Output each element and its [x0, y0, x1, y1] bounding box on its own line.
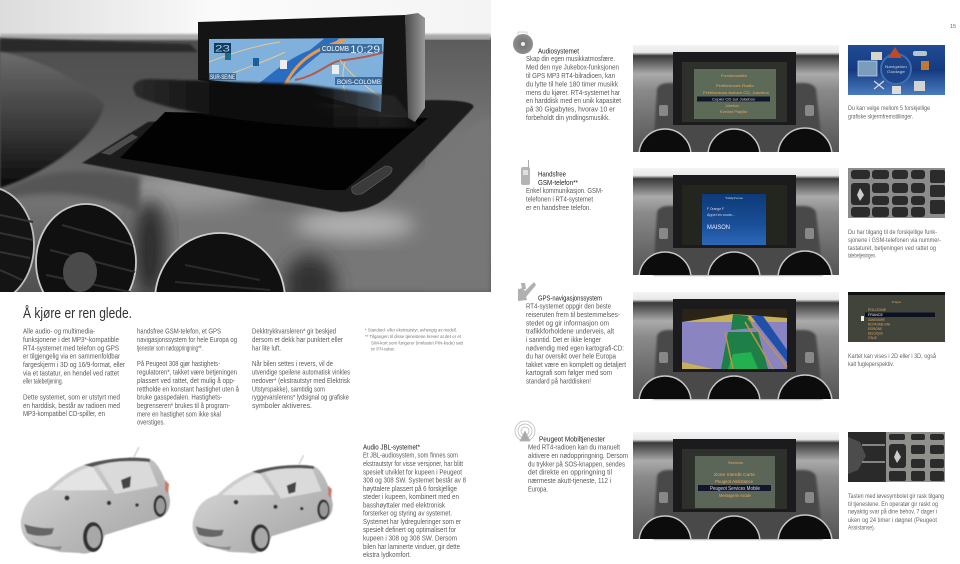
dashboard photo: phone screen: MAISON — [707, 225, 730, 231]
GPS text: standard på harddisken! — [526, 376, 591, 386]
intro text column 2: tjenester som nødoppringning**. — [137, 343, 203, 352]
page number: 15 — [950, 24, 956, 30]
JBL audio text block — [363, 442, 466, 559]
caption: lion key: Assistanse). — [848, 524, 875, 532]
dashboard photo: services menu: Messagerie vocale — [719, 493, 752, 498]
caption: phone keypad: talebetjeningen. — [848, 252, 876, 260]
map screen: COLOMB — [322, 46, 349, 53]
footnotes: * Standard- eller ekstrautstyr, avhengig av modell. — [365, 328, 457, 332]
folding screen flap — [133, 79, 420, 128]
intro text column 1: er tilgjengelig via en sammenfoldbar — [23, 352, 120, 361]
audio system text: mens du kjører. RT4-systemet har — [526, 88, 620, 97]
car illustration: speakers left — [21, 447, 170, 554]
dashboard photo: audio menu: Jukebox — [725, 103, 739, 108]
intro text column 1: en harddisk, består av radioen med — [23, 401, 120, 410]
intro text column 3: har lite luft. — [252, 343, 281, 352]
Peugeot mobile services text: du trykker på SOS-knappen, sendes — [528, 459, 625, 468]
recess black interior — [120, 112, 428, 190]
intro text column 3: symboler aktiveres. — [252, 401, 312, 410]
GPS text: GPS-navigasjonssystem — [538, 294, 602, 302]
intro text column 2: handsfree GSM-telefon, et GPS — [137, 326, 221, 336]
GPS text: i sanntid. Det er ikke lenger — [526, 335, 601, 344]
Peugeot mobile services text: Europa. — [528, 484, 548, 493]
dashboard photo: phone screen: F Orange F — [707, 206, 724, 211]
caption: phone keypad: sjonene i GSM-telefonen via nummer- — [848, 237, 941, 244]
caption: graphic themes: grafiske skjermfremstillinger. — [848, 114, 913, 120]
dashboard photo: phone screen: Appel en cours... — [707, 212, 735, 217]
thumbnail: map language menu: FRANCE — [868, 313, 883, 317]
handsfree text — [526, 170, 603, 212]
intro text column 1: funksjonene i det MP3*-kompatible — [23, 335, 119, 344]
map screen: BOIS-COLOMB — [337, 79, 381, 86]
intro text column 2: rettholde en konstant hastighet uten å — [137, 384, 240, 393]
intro text column 3: Når bilen settes i revers, vil de — [252, 359, 333, 368]
thumbnail: graphic theme menu: Navigation — [885, 65, 907, 69]
audio system text: en harddisk med en unik kapasitet — [526, 96, 621, 105]
footnotes: inn i RT4-radioen. — [371, 346, 395, 352]
hero photo: fold-out navigation screen — [0, 0, 491, 292]
intro text column 3: ryggevarslerens* lydsignal og grafiske — [252, 393, 349, 402]
dashboard photo: audio menu: Préférences lecture CD, Jukebox — [703, 90, 769, 95]
caption: phone keypad: tastaturet, betjeningen ved rattet og — [848, 245, 936, 252]
thumbnail: phone keypad — [848, 168, 945, 218]
dashboard photo: phone screen — [633, 168, 839, 305]
caption: lion key: til tjenestene. En operatør gir raskt og — [848, 501, 938, 508]
icon: GPS satellite — [518, 282, 536, 301]
Peugeot mobile services text — [528, 434, 628, 493]
JBL audio text block: basshøyttaler med elektronisk — [363, 500, 445, 509]
Peugeot mobile services text: Med RT4-radioen kan du manuelt — [528, 442, 620, 452]
intro text column 1: RT4-systemet med telefon og GPS — [23, 343, 119, 352]
dashboard photo: audio menu: Fonctionnalités — [721, 73, 747, 78]
JBL audio text block: bilen har laminerte vinduer, gir dette — [363, 542, 460, 551]
intro text column 3: nedover* (ekstrautstyr med Elektrisk — [252, 376, 350, 385]
thumbnail: map language menu: POLOGNE — [868, 308, 886, 312]
handsfree text: Enkel kommunikasjon. GSM- — [526, 186, 603, 195]
caption: phone keypad — [848, 229, 941, 260]
intro text column 2: overstiges. — [137, 418, 165, 427]
car illustration: speakers right — [193, 455, 333, 553]
caption: map views — [848, 352, 936, 368]
JBL audio text block: ekstra lydkomfort. — [363, 550, 411, 559]
dashboard photo: services menu: Peugeot Services Mobile — [710, 486, 760, 492]
intro text column 1: fargeskjerm i 3D og 16/9-format, eller — [23, 360, 125, 369]
intro text column 1: Alle audio- og multimedia- — [23, 326, 95, 336]
handsfree text: Handsfree — [538, 170, 566, 178]
JBL audio text block: spesielt utviklet for kupeen i Peugeot — [363, 467, 462, 476]
right small button — [352, 166, 392, 194]
intro text column 3 — [252, 326, 350, 410]
intro text column 1: Dette systemet, som er utstyrt med — [23, 392, 120, 402]
audio system text: til GPS MP3 RT4-bilradioen, kan — [526, 71, 615, 80]
air vents — [0, 188, 286, 292]
footnotes — [365, 328, 464, 352]
audio system text: Skap din egen musikkatmosfære. — [526, 54, 615, 63]
dashboard photo: phone screen: Téléphone — [725, 196, 743, 200]
handsfree text: GSM-telefon** — [538, 178, 578, 187]
GPS text: nødvendig med egen kartografi-CD: — [526, 343, 624, 352]
JBL audio text block: ekstrautstyr for visse versjoner, har blitt — [363, 459, 463, 468]
map screen: SUR-SEINE — [210, 75, 235, 81]
thumbnail: lion key — [848, 432, 945, 482]
JBL audio text block: Et JBL-audiosystem, som finnes som — [363, 451, 458, 460]
audio system text: Audiosystemet — [538, 46, 579, 56]
intro column heading: Å kjøre er ren glede. — [23, 305, 132, 322]
Peugeot mobile services text: nærmeste akutt-tjeneste, 112 i — [528, 476, 611, 485]
map screen: 10:29 — [350, 44, 380, 56]
thumbnail: map language menu: BELGIQUE — [868, 332, 883, 336]
GPS text: trafikkforholdene underveis, alt — [526, 327, 614, 336]
dashboard photo: audio menu: Préférences Radio — [716, 83, 755, 88]
recess surround — [82, 100, 473, 212]
JBL audio text block: Systemet har lydreguleringer som er — [363, 517, 461, 526]
JBL audio text block: høyttalere plassert på 6 forskjellige — [363, 484, 457, 493]
intro text column 3: dersom et dekk har punktert eller — [252, 335, 343, 344]
audio system text — [526, 46, 621, 122]
map screen: 23 — [215, 44, 230, 54]
footnotes: SIM-kort som fungerer (innlastet PIN-kode) satt — [371, 340, 464, 346]
intro text column 2: mere en hastighet som ikke skal — [137, 409, 221, 418]
audio system text: du lytte til hele 180 timer musikk — [526, 79, 618, 88]
GPS text: stedet og gir informasjon om — [526, 318, 609, 327]
dashboard photo: services menu — [633, 432, 839, 564]
icon: CD and music sheet — [513, 32, 533, 54]
GPS text: takket være en komplett og detaljert — [526, 360, 626, 369]
intro text column 1: via et tastatur, en hendel ved rattet — [23, 368, 119, 377]
left dashboard hump — [0, 52, 104, 188]
footnotes: ** Tilgangen til disse tjenestene krever at det er et — [365, 334, 462, 339]
intro text column 3: Utstyrspakke), samtidig som — [252, 384, 325, 393]
intro text column 3: utvendige speilene automatisk vinkles — [252, 368, 350, 376]
intro text column 1: eller talebetjening. — [23, 377, 63, 386]
GPS text: kartografi som følger med som — [526, 368, 612, 377]
thumbnail: graphic theme menu — [848, 45, 945, 95]
dashboard photo: services menu: Services — [728, 460, 743, 465]
dashboard photo: services menu: Zone Interdit Carte — [714, 472, 756, 477]
Peugeot mobile services text: det direkte en oppringning til — [528, 468, 612, 477]
intro text column 1 — [23, 326, 125, 418]
Peugeot mobile services text: aktivere en nødoppringning. Dersom — [528, 451, 628, 460]
intro text column 2: regulatoren*, takket være betjeningen — [137, 368, 237, 376]
GPS text — [526, 294, 626, 386]
caption: lion key: uken og 24 timer i døgnet (Peugeot — [848, 517, 937, 524]
dashboard photo: audio menu: Copier CD sur Jukebox — [712, 96, 755, 102]
dashboard photo: 3D map — [633, 292, 839, 429]
caption: phone keypad: Du har tilgang til de forskjellige funk- — [848, 229, 937, 236]
intro text column 2: På Peugeot 308 gjør hastighets- — [137, 359, 220, 368]
icon: mobile phone — [521, 160, 530, 185]
caption: lion key: nøyaktig svar på dine behov, 7 dager i — [848, 508, 937, 516]
dashboard photo: audio menu — [633, 45, 839, 152]
thumbnail: map language menu: DANEMARK — [868, 318, 886, 322]
caption: map views: Kartet kan vises i 2D eller i 3D, også — [848, 352, 936, 360]
screen side panel — [405, 13, 425, 122]
GPS text: RT4-systemet oppgir den beste — [526, 302, 611, 310]
caption: map views: kalt fugleperspektiv. — [848, 361, 894, 368]
dashboard photo: audio menu: Eveline Playlist — [720, 109, 748, 114]
JBL audio text block: kupeen i 308 og 308 SW. Dersom — [363, 534, 457, 542]
intro text column 1: MP3-kompatibel CD-spiller, en — [23, 409, 105, 418]
GPS text: reiseruten frem til bestemmelses- — [526, 310, 620, 319]
GPS text: du har oversikt over hele Europa — [526, 352, 617, 361]
screen housing — [198, 15, 408, 106]
thumbnail: map language menu: ROYAUME-UNI — [868, 322, 890, 326]
intro text column 2: bruke gasspedalen. Hastighets- — [137, 393, 222, 402]
intro text column 2 — [137, 326, 240, 427]
JBL audio text block: forsterker og styring av systemet. — [363, 509, 452, 518]
map screen — [209, 38, 384, 112]
intro text column 2: plassert ved rattet, det mulig å opp- — [137, 376, 235, 385]
thumbnail: map language menu: ITALIE — [868, 336, 877, 340]
JBL audio text block: steder i kupeen, kombinert med en — [363, 492, 459, 501]
caption: lion key — [848, 493, 944, 532]
thumbnail: map language menu: ESPAGNE — [868, 327, 882, 331]
JBL audio text block: spesielt definert og optimalisert for — [363, 525, 456, 534]
JBL audio text block: Audio JBL-systemet* — [363, 442, 420, 452]
intro text column 2: begrenseren* brukes til å program- — [137, 401, 230, 410]
Peugeot mobile services text: Peugeot Mobiltjenester — [539, 434, 605, 444]
audio system text: forbeholdt din yndlingsmusikk. — [526, 113, 610, 122]
audio system text: Med den nye Jukebox-funksjonen — [526, 62, 619, 72]
handsfree text: telefonen i RT4-systemet — [526, 194, 593, 204]
intro text column 2: navigasjonssystem for hele Europa og — [137, 335, 237, 344]
handsfree text: er en handsfree telefon. — [526, 203, 591, 212]
thumbnail: map language menu: Pays — [892, 300, 902, 304]
thumbnail: graphic theme menu: Guidage — [887, 70, 905, 74]
caption: graphic themes — [848, 105, 930, 120]
left small button — [101, 134, 138, 155]
thumbnail: map language menu — [848, 292, 945, 342]
caption: graphic themes: Du kan velge mellom 5 forskjellige — [848, 105, 930, 112]
JBL audio text block: 308 og 308 SW. Systemet består av 8 — [363, 476, 466, 485]
audio system text: på 30 Gigabytes, hvorav 10 er — [526, 105, 615, 114]
intro text column 3: Dekktrykkvarsleren* gir beskjed — [252, 326, 336, 336]
dashboard photo: services menu: Peugeot Assistance — [715, 479, 754, 484]
icon: radio waves — [515, 421, 535, 441]
